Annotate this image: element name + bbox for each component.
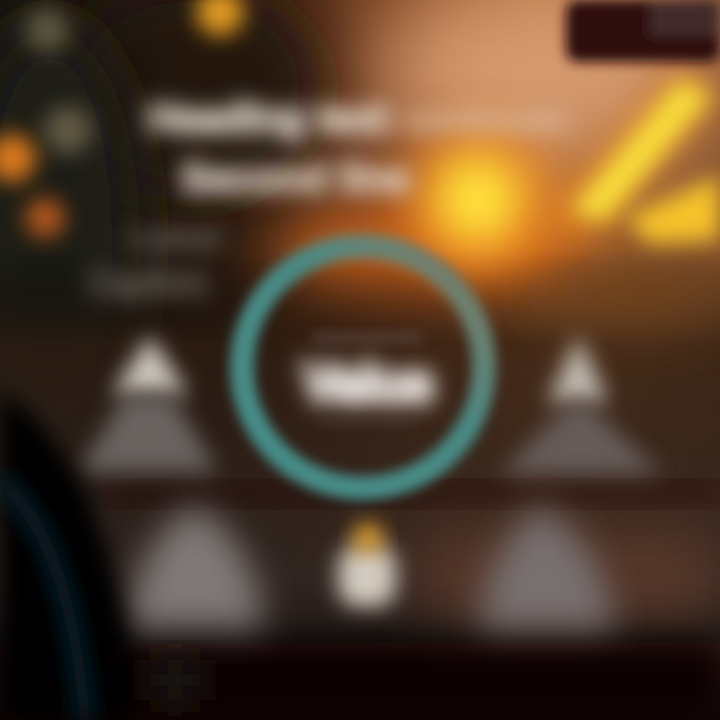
text block: upper left: [88, 222, 220, 304]
title: [148, 94, 567, 201]
left stat group: [78, 335, 218, 472]
title: Second line: [180, 154, 410, 201]
teal ring: [242, 246, 484, 488]
sun glow: [383, 105, 573, 295]
bottom center stat: [338, 523, 396, 607]
title: Heading text: [148, 94, 388, 141]
central value: [303, 332, 433, 426]
title: continues: [402, 101, 567, 137]
text block: upper left: Caption: [88, 262, 208, 304]
light rays: [530, 70, 720, 244]
bottom right stat: [478, 505, 615, 628]
text block: upper left: Label: [130, 222, 220, 252]
bokeh lights: [0, 0, 244, 238]
bottom left stat: [128, 505, 265, 628]
central value: Value: [303, 351, 433, 414]
dark arc bottom left: [0, 390, 200, 720]
right stat group: [500, 335, 662, 474]
dark box top right: [566, 0, 720, 62]
